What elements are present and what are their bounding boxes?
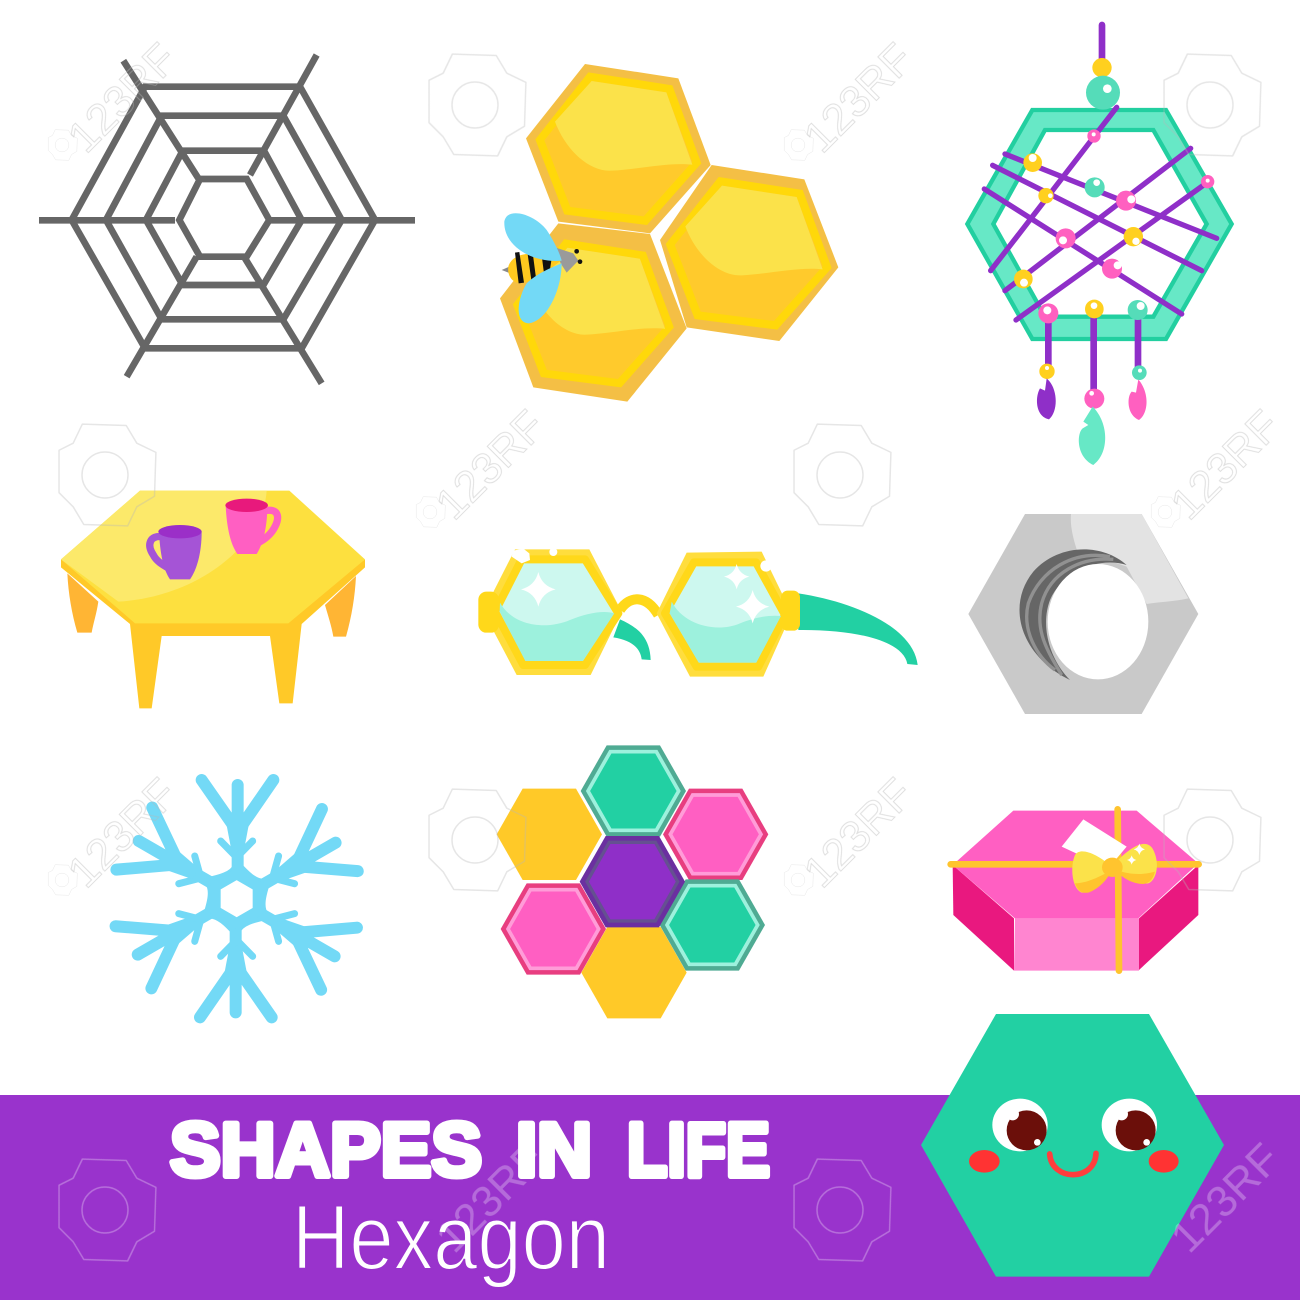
title: SHAPES bbox=[170, 1108, 482, 1193]
smile bbox=[1050, 1153, 1096, 1175]
pink hexagon right bbox=[663, 789, 768, 880]
yellow hexagon bottom bbox=[581, 927, 687, 1018]
panel: hex nut bbox=[968, 514, 1198, 714]
box lid bbox=[953, 811, 1198, 918]
watermarks: 123RF bbox=[1161, 401, 1289, 529]
panel: dream catcher bbox=[967, 25, 1232, 465]
watermarks: 123RF bbox=[794, 769, 922, 897]
right lens bbox=[657, 552, 792, 677]
bridge bbox=[620, 599, 658, 615]
title: IN bbox=[516, 1108, 592, 1193]
table edge and front legs bbox=[61, 559, 365, 708]
honeycomb cell top bbox=[535, 72, 701, 225]
panel: hexagon flower bbox=[497, 745, 768, 1018]
icon: bow bbox=[1072, 844, 1157, 893]
table highlight bbox=[61, 491, 267, 602]
thread highlights bbox=[1027, 555, 1113, 675]
right hinge bbox=[781, 591, 800, 631]
beads bbox=[1014, 58, 1214, 409]
honeycomb base bbox=[500, 64, 838, 402]
left cheek bbox=[969, 1150, 1000, 1173]
panel: hexagon glasses bbox=[478, 548, 918, 677]
icon: bee bbox=[502, 213, 582, 323]
green hexagon top bbox=[581, 745, 686, 837]
panel: table with cups bbox=[61, 491, 365, 708]
title bbox=[170, 1108, 770, 1193]
panel: honeycomb with bee bbox=[500, 64, 838, 402]
panel: hexagon character bbox=[921, 1014, 1224, 1277]
left hinge bbox=[478, 592, 499, 633]
feather teal bbox=[1079, 407, 1105, 465]
watermarks: 123RF bbox=[58, 769, 186, 897]
banner bbox=[0, 1095, 1300, 1300]
nut body bbox=[968, 514, 1198, 714]
nut highlight bbox=[1071, 514, 1188, 604]
far temple bbox=[613, 619, 651, 660]
watermarks: 123RF bbox=[426, 401, 554, 529]
pink hexagon left bbox=[501, 883, 606, 975]
panel: gift box bbox=[951, 809, 1199, 971]
panel: spider web bbox=[39, 55, 415, 383]
nut thread bbox=[1020, 549, 1127, 680]
icon: pink cup bbox=[225, 499, 278, 554]
near temple bbox=[798, 593, 918, 665]
table top bbox=[61, 491, 365, 623]
right eye bbox=[1102, 1099, 1157, 1151]
green hexagon right bbox=[660, 879, 765, 971]
watermarks: 123RF bbox=[794, 34, 922, 162]
nut hole bbox=[1048, 564, 1148, 679]
watermarks: 123RF bbox=[1161, 1134, 1289, 1262]
panel: snowflake bbox=[116, 780, 358, 1017]
box right side bbox=[1139, 865, 1198, 970]
hanging strings bbox=[1048, 25, 1138, 397]
honeycomb cell bottom bbox=[513, 239, 674, 387]
feather purple bbox=[1037, 378, 1056, 419]
purple strings bbox=[984, 107, 1217, 320]
catcher frame bbox=[967, 110, 1232, 339]
back table legs bbox=[67, 573, 356, 637]
snowflake centre hexagon bbox=[215, 874, 258, 923]
subtitle: Hexagon bbox=[292, 1187, 610, 1289]
character body bbox=[921, 1014, 1224, 1277]
purple hexagon centre bbox=[580, 836, 685, 927]
feather pink bbox=[1129, 379, 1147, 420]
title: LIFE bbox=[627, 1108, 770, 1193]
web spokes bbox=[39, 55, 415, 383]
snowflake arms bbox=[116, 780, 358, 1017]
gift card bbox=[1062, 819, 1127, 868]
ribbon bbox=[951, 809, 1199, 971]
left lens bbox=[483, 548, 622, 675]
left eye bbox=[992, 1099, 1048, 1151]
honeycomb cell right bbox=[666, 177, 832, 330]
right cheek bbox=[1149, 1150, 1179, 1173]
box front bbox=[1014, 918, 1139, 971]
yellow hexagon left bbox=[497, 789, 602, 880]
box left side bbox=[953, 865, 1014, 971]
icon: purple cup bbox=[150, 525, 202, 579]
web rings bbox=[72, 87, 375, 348]
watermarks: 123RF bbox=[426, 1134, 554, 1262]
watermarks: 123RF bbox=[58, 34, 186, 162]
